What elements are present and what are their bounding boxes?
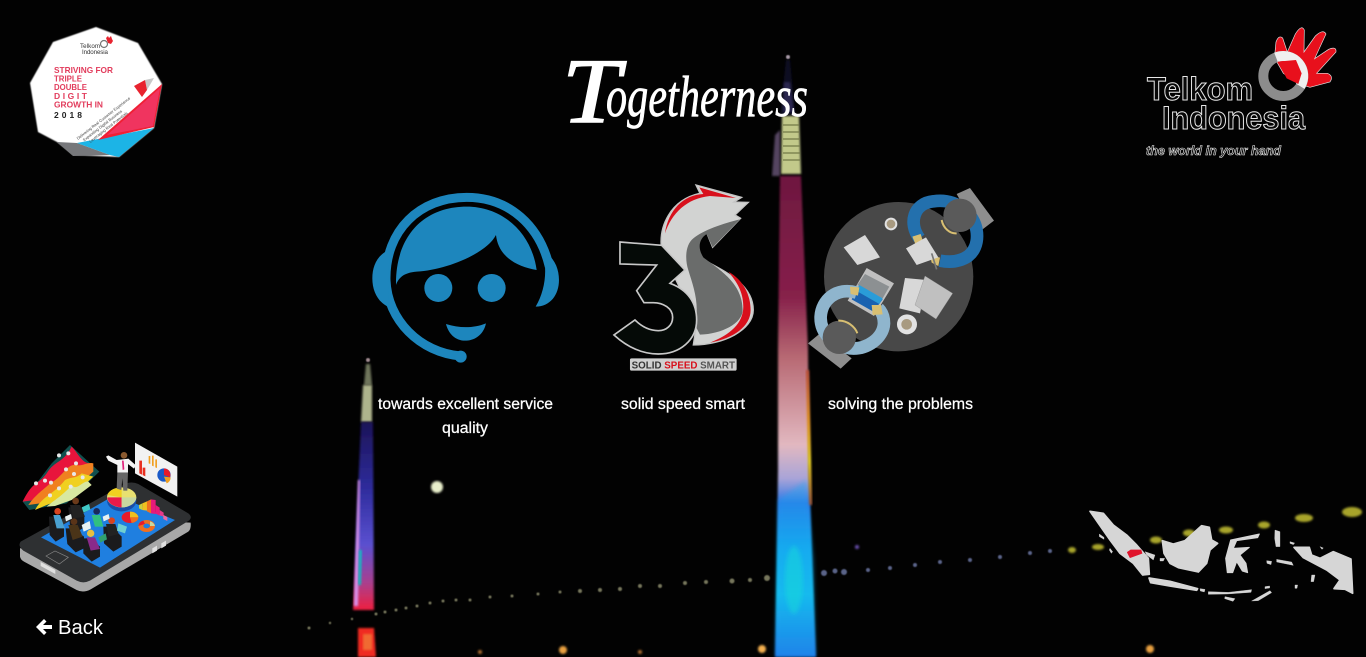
caption: solving the problems: solving the problems — [828, 396, 973, 413]
top papers — [906, 237, 938, 265]
badge: mini logo: Telkom — [80, 43, 100, 50]
caption: solid speed smart: solid speed smart — [621, 396, 746, 413]
Papua — [1294, 547, 1353, 593]
number 3 — [614, 242, 697, 354]
right eye — [478, 274, 506, 302]
3D area chart — [23, 445, 99, 510]
presenter — [106, 452, 136, 491]
microphone — [455, 351, 467, 363]
logo: wordmark: Telkom — [1147, 71, 1253, 107]
Java — [1149, 578, 1198, 590]
background photo: moon light — [431, 481, 443, 493]
bottom person arms — [821, 291, 884, 348]
back arrow — [36, 619, 52, 635]
caption: towards excellent service quality: towards excellent service — [378, 396, 553, 413]
badge: diagonal small text: Expanding Digital Business — [82, 108, 123, 142]
tablet screen light blue band — [856, 285, 883, 304]
left ear cup — [372, 250, 390, 307]
tablet screen — [857, 274, 889, 298]
S dark inner ribbon — [686, 219, 743, 335]
badge: red tag — [134, 80, 147, 97]
background photo: bridge lights — [308, 507, 1362, 654]
title: T — [562, 40, 627, 142]
background photo: small lit tower — [353, 358, 376, 657]
tablet — [848, 268, 894, 316]
title — [562, 40, 808, 142]
badge: red facet — [98, 84, 162, 140]
icon: meeting around a table — [808, 188, 994, 369]
icon: 3S solid speed smart — [614, 185, 753, 371]
badge: diagonal small text: Delivering Real Customer Experience — [76, 95, 132, 141]
Kalimantan — [1162, 526, 1218, 572]
right papers — [899, 278, 927, 313]
bottom chair — [808, 333, 852, 369]
badge: blue facet — [77, 128, 154, 157]
bottom collar — [838, 321, 857, 333]
pen — [932, 253, 937, 269]
notepad — [915, 276, 953, 319]
top hands — [912, 234, 940, 266]
coffee top — [887, 220, 895, 228]
top collar — [942, 220, 957, 233]
pie podium — [107, 487, 136, 511]
hair — [396, 207, 537, 285]
pie chart on phone 1 — [122, 512, 138, 523]
S red accent top — [665, 187, 736, 233]
logo: ring — [1263, 56, 1303, 96]
cup saucer bottom — [897, 314, 917, 334]
badge: mini logo — [80, 36, 113, 56]
S body with arrow — [661, 185, 753, 345]
pie chart on phone 2 — [138, 520, 155, 532]
S red accent bottom — [710, 272, 751, 343]
left eye — [424, 274, 452, 302]
illustration: isometric smartphone business meeting — [19, 443, 191, 591]
coffee bottom — [901, 319, 912, 330]
bottom hands — [850, 287, 883, 315]
badge: mini logo: Indonesia — [82, 49, 109, 56]
badge: grey arrow tip — [145, 78, 154, 90]
badge: pink facet — [107, 88, 160, 135]
bar chart on phone — [139, 499, 167, 521]
phone home button — [46, 551, 68, 564]
back link — [36, 617, 104, 639]
badge: striving for triple double digit growth — [30, 27, 162, 157]
bottom person head — [823, 321, 856, 354]
background photo: large lit tower — [772, 55, 816, 657]
logo: wordmark — [1147, 71, 1305, 136]
tablet screen blue — [852, 287, 883, 312]
badge: headline: 2018 — [54, 110, 82, 120]
top chair — [957, 188, 994, 233]
icon: customer service headset — [372, 197, 559, 363]
coffee cup top — [885, 218, 897, 230]
badge: headline: DOUBLE — [54, 82, 87, 92]
solid speed smart label — [630, 358, 737, 371]
logo: Telkom Indonesia — [1146, 28, 1336, 158]
phone side buttons — [41, 541, 166, 574]
phone side — [20, 520, 191, 591]
caption: towards excellent service quality — [378, 396, 553, 437]
logo: red hand — [1275, 28, 1336, 87]
badge: grey base — [57, 142, 110, 156]
smaller islands — [1099, 530, 1323, 601]
label text: SOLID SPEED SMART — [632, 360, 736, 371]
logo: tagline: the world in your hand — [1146, 143, 1282, 158]
logo: wordmark: Indonesia — [1162, 100, 1305, 136]
phone top — [19, 482, 191, 582]
badge: headline — [54, 65, 113, 120]
presentation board — [135, 443, 177, 497]
South Sumatra highlighted — [1127, 550, 1142, 558]
back label: Back — [58, 617, 104, 639]
audience at chairs — [49, 498, 127, 562]
title: ogetherness — [606, 64, 808, 129]
headset band — [386, 197, 549, 356]
badge: diagonal small text: Leveraging Real Potentials — [88, 110, 129, 144]
left papers — [844, 235, 880, 265]
caption: towards excellent service quality: quality — [442, 420, 488, 437]
badge: headline: STRIVING FOR — [54, 65, 113, 75]
right ear cup — [536, 250, 559, 307]
Sumatra — [1090, 511, 1149, 575]
phone screen — [41, 495, 175, 568]
smile — [446, 323, 486, 341]
badge: headline: DIGIT — [54, 91, 88, 101]
table — [824, 202, 973, 351]
badge: headline: TRIPLE — [54, 74, 82, 84]
Sulawesi — [1226, 534, 1259, 573]
map: Indonesia — [1090, 511, 1353, 601]
top person blue arms — [914, 201, 977, 262]
badge: headline: GROWTH IN — [54, 100, 103, 110]
top person head — [943, 199, 977, 232]
